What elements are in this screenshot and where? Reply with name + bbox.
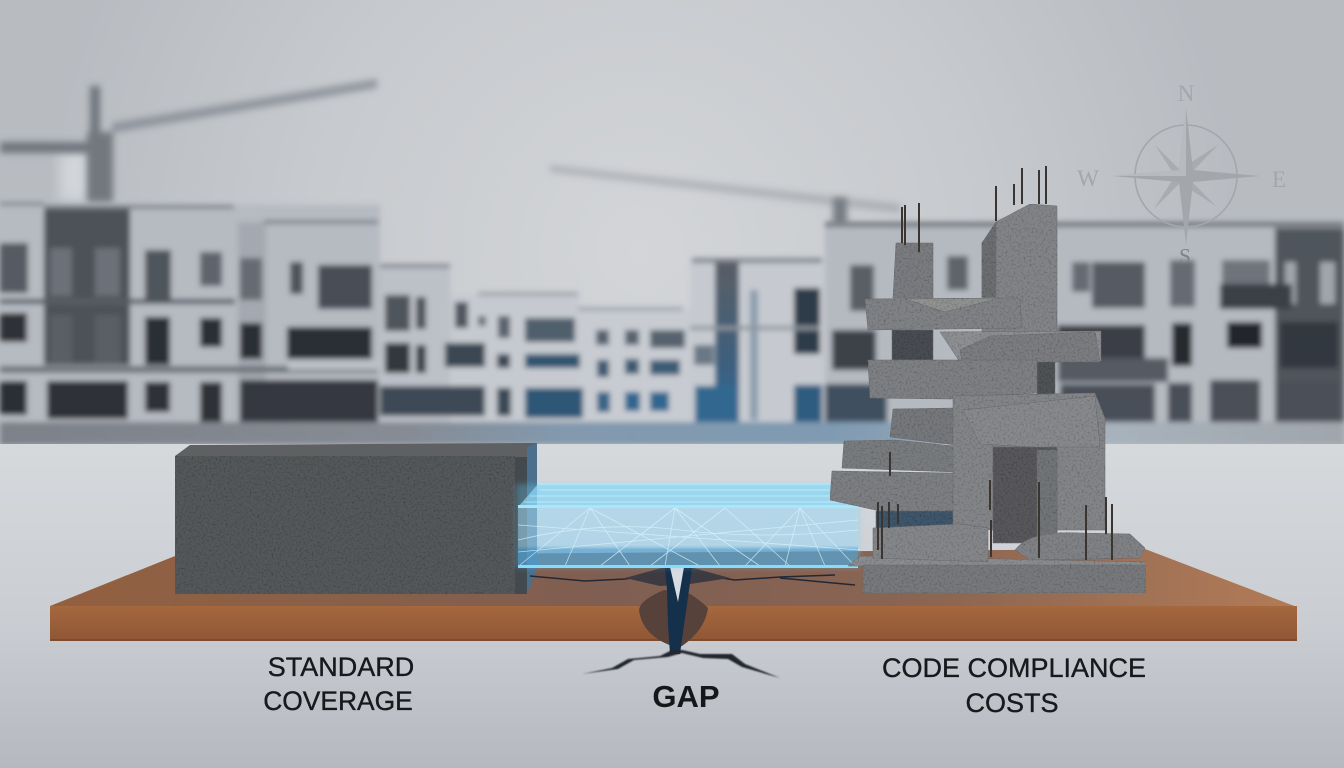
block: standard coverage concrete [175,443,537,594]
label: costs: COSTS [965,688,1059,718]
slab 5 [842,440,955,472]
white gap sliver [670,567,684,602]
slab 1 [865,298,1022,330]
wooden base board [50,549,1297,641]
crack core [665,568,692,654]
icon: compass rose [1077,81,1286,268]
crack lines on board [530,575,855,585]
small slab [890,408,955,445]
crack wedge top [625,567,730,586]
holographic glass bridge [516,483,860,568]
blurred apartment buildings [0,202,1344,445]
rebar rods [878,166,1112,560]
left building [0,202,388,435]
label: code compliance: CODE COMPLIANCE [882,653,1146,683]
glass edges [518,505,860,508]
label: gap: GAP [652,679,720,714]
floor [0,444,1344,768]
label: standard coverage line 2: COVERAGE [263,686,413,716]
icon: compass rose: N [1178,81,1195,106]
mesh lines [518,490,860,566]
icon: compass rose: W [1077,166,1099,191]
glass glow [516,484,860,568]
slab 2 [940,331,1101,362]
stack: code compliance concrete rubble [830,204,1146,593]
icon: compass rose: S [1179,244,1191,268]
middle buildings [380,264,690,426]
floor cracks [582,650,780,678]
right-centre building [690,258,825,424]
short column [893,243,933,298]
base slab [848,556,1146,566]
right building [825,222,1344,434]
icon: compass rose: E [1272,167,1286,192]
gap: crack in board and floor [530,567,855,678]
street haze [0,422,1344,445]
blurred cranes [0,79,900,225]
rubble right [1015,533,1145,560]
arch block [953,393,1105,530]
crack bowl in board front [639,590,708,646]
tall column [982,204,1057,332]
label: standard coverage: STANDARD [268,652,414,682]
rubble left [873,524,988,562]
slab 3 [868,360,1037,399]
background sky [0,0,1344,450]
slab 6 [830,471,955,512]
